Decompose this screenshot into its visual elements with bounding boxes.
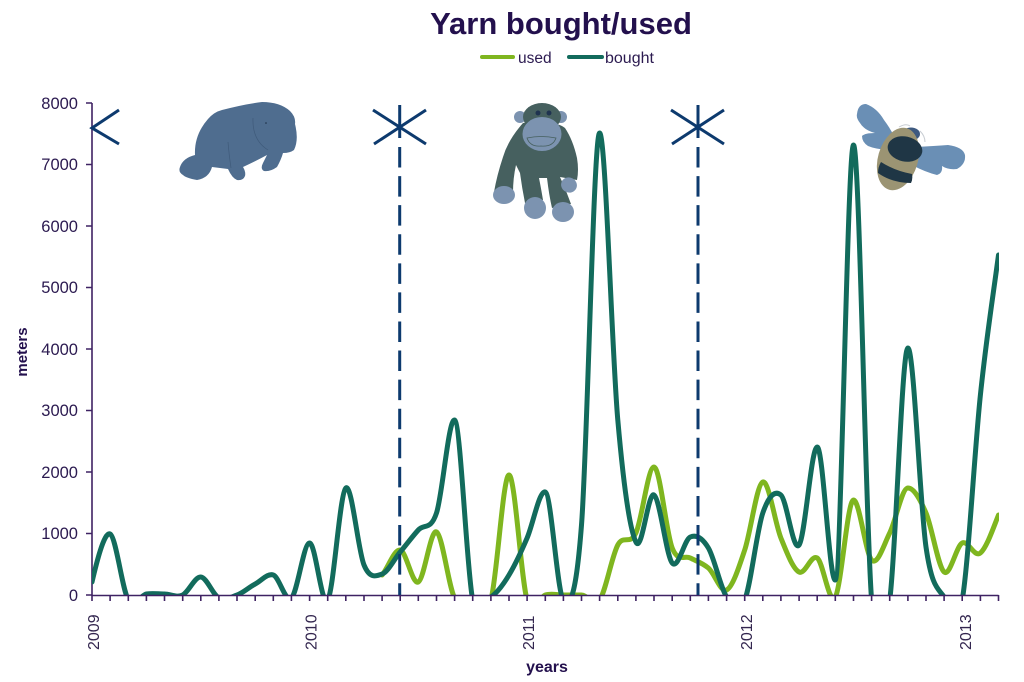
y axis labels: 2000 xyxy=(41,464,78,482)
legend: bought xyxy=(569,50,654,67)
x axis labels: 2013 xyxy=(958,614,975,650)
y axis labels: 0 xyxy=(69,587,78,605)
x axis title: years xyxy=(526,659,568,676)
icon: gorilla xyxy=(493,103,579,222)
title: Yarn bought/used xyxy=(430,6,692,41)
y axis labels: 8000 xyxy=(41,95,78,113)
x axis xyxy=(92,595,998,601)
legend: bought: bought xyxy=(605,50,654,67)
y axis labels xyxy=(41,95,78,605)
era marker: left edge xyxy=(92,110,119,144)
divider: era marker 1 xyxy=(373,105,426,595)
legend: used: used xyxy=(518,50,552,67)
x axis labels: 2009 xyxy=(86,614,103,650)
x axis labels: 2011 xyxy=(521,615,538,650)
y axis labels: 7000 xyxy=(41,156,78,174)
icon: manatee xyxy=(179,102,297,180)
y axis labels: 6000 xyxy=(41,218,78,236)
y axis title: meters xyxy=(14,327,31,377)
x axis labels: 2010 xyxy=(304,614,320,650)
y axis labels: 5000 xyxy=(41,279,78,297)
legend xyxy=(482,50,654,67)
icon: bee xyxy=(857,104,965,195)
y axis labels: 4000 xyxy=(41,341,78,359)
x axis labels: 2012 xyxy=(739,614,756,650)
y axis labels: 1000 xyxy=(41,525,78,543)
legend: used xyxy=(482,50,552,67)
y axis xyxy=(86,103,92,595)
y axis labels: 3000 xyxy=(41,402,78,420)
bought line xyxy=(92,133,998,645)
used line xyxy=(382,467,999,611)
divider: era marker 2 xyxy=(671,105,724,595)
x axis labels xyxy=(86,614,975,650)
